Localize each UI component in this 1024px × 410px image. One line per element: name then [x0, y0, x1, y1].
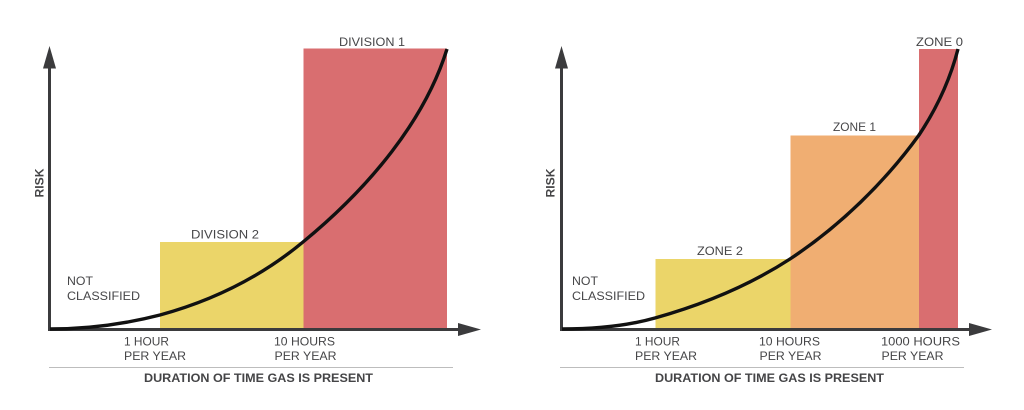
panel: division chart	[32, 35, 481, 385]
panel: zone chart	[544, 35, 992, 385]
risk curve	[562, 49, 958, 329]
x axis title: DURATION OF TIME GAS IS PRESENT	[655, 373, 884, 385]
x axis arrow	[48, 323, 481, 336]
label: zone 1: ZONE 1	[833, 120, 876, 134]
x axis title: DURATION OF TIME GAS IS PRESENT	[144, 373, 373, 385]
y axis arrow	[555, 46, 568, 331]
label: division 2: DIVISION 2	[191, 228, 259, 242]
zone: division 2 yellow bar	[160, 242, 304, 328]
tick label: 1 hour per year: 1 HOUR	[124, 334, 169, 348]
tick label: 1 hour per year: PER YEAR	[124, 349, 186, 363]
tick label: 10 hours per year: 10 HOURS	[274, 334, 335, 348]
tick label: 1 hour per year: PER YEAR	[635, 349, 697, 363]
y axis label: risk: RISK	[32, 168, 46, 198]
label: zone 2: ZONE 2	[697, 244, 743, 258]
label: not classified: CLASSIFIED	[572, 289, 645, 303]
zone: zone 2 yellow bar	[656, 259, 790, 328]
zone: division 1 red bar	[304, 48, 447, 328]
y axis arrow	[43, 46, 56, 331]
tick label: 1000 hours per year: PER YEAR	[882, 349, 944, 363]
label: not classified: CLASSIFIED	[67, 289, 140, 303]
zone: zone 0 red bar	[919, 49, 958, 328]
tick label: 10 hours per year: PER YEAR	[760, 349, 822, 363]
tick label: 10 hours per year: 10 HOURS	[759, 334, 820, 348]
x axis arrow	[560, 323, 992, 336]
label: not classified: NOT	[67, 274, 94, 288]
label: zone 0: ZONE 0	[916, 35, 963, 49]
axis divider	[49, 367, 453, 368]
tick label: 1 hour per year: 1 HOUR	[635, 334, 680, 348]
risk curve	[50, 49, 447, 329]
label: not classified: NOT	[572, 274, 599, 288]
axis divider	[560, 367, 964, 368]
y axis label: risk: RISK	[544, 168, 558, 198]
zone: zone 1 orange bar	[790, 136, 919, 328]
tick label: 10 hours per year: PER YEAR	[274, 349, 337, 363]
label: division 1: DIVISION 1	[339, 35, 405, 49]
tick label: 1000 hours per year: 1000 HOURS	[881, 334, 960, 348]
